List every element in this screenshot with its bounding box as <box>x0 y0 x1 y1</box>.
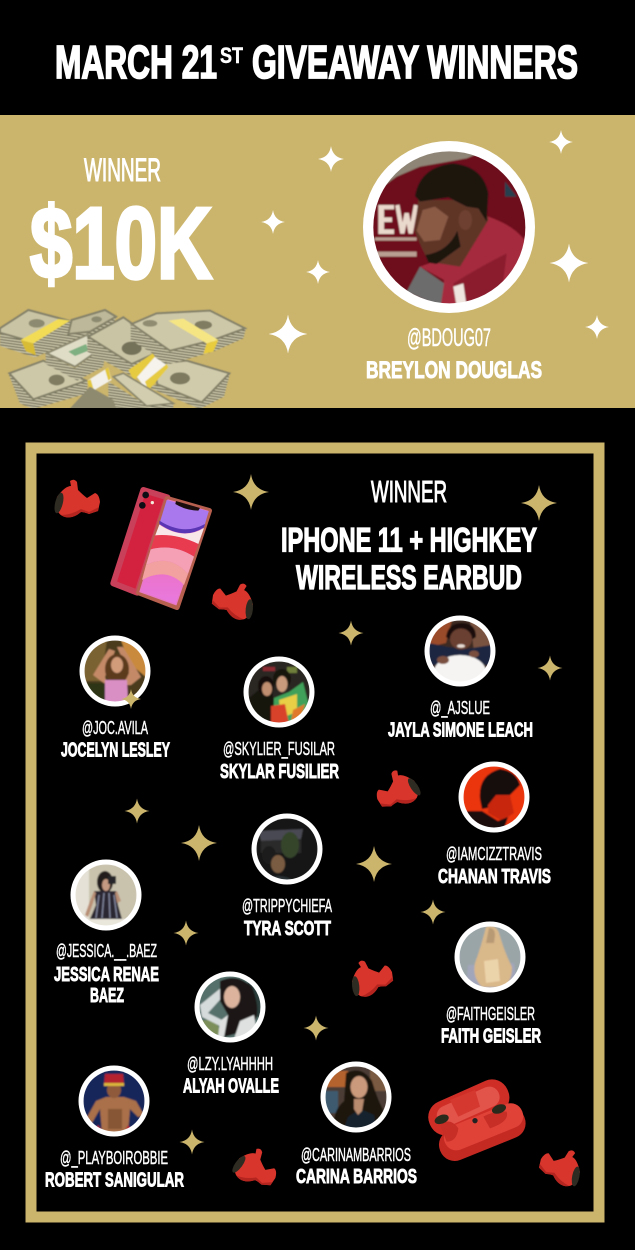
heading: prize description <box>281 522 537 597</box>
panel: phone and earbud winners frame <box>31 448 599 1217</box>
avatar: Jessica <box>70 860 142 930</box>
prize amount: $10K <box>30 188 212 300</box>
avatar: Robert <box>78 1066 150 1136</box>
winner: Chanan Travis <box>438 762 551 888</box>
handle: @CARINAMBARRIOS <box>301 1145 411 1165</box>
winner: Jocelyn Lesley <box>61 636 170 762</box>
winner: Carina Barrios <box>296 1062 417 1188</box>
avatar: Jocelyn <box>80 636 150 709</box>
name: ROBERT SANIGULAR <box>45 1170 184 1192</box>
winner: Tyra Scott <box>242 814 332 940</box>
avatar: Carina <box>320 1062 392 1132</box>
name: JESSICA RENAE <box>54 964 159 986</box>
winner: Jessica Renae Baez <box>54 860 159 1007</box>
icon: red wireless earbud case <box>423 1074 530 1166</box>
avatar: Tyra <box>252 814 322 884</box>
name: FAITH GEISLER <box>441 1026 541 1048</box>
winner: Robert Sanigular <box>45 1066 184 1192</box>
icon: earbud middle right <box>370 764 425 813</box>
handle: @TRIPPYCHIEFA <box>242 896 332 916</box>
winner: Faith Geisler <box>441 922 541 1048</box>
handle: @_PLAYBOIROBBIE <box>60 1148 168 1169</box>
handle: @JESSICA.__.BAEZ <box>56 941 157 962</box>
handle: @BDOUG07: @BDOUG07 <box>407 324 491 352</box>
handle: @JOC.AVILA <box>82 718 148 738</box>
title: ST <box>220 43 243 68</box>
handle: @_AJSLUE <box>430 698 490 719</box>
name: ALYAH OVALLE <box>183 1076 279 1098</box>
panel: grand prize winner <box>0 115 635 410</box>
heading: winner: WINNER <box>371 474 447 509</box>
icon: earbud center <box>343 952 397 1001</box>
winner: Jayla Simone Leach <box>388 616 533 742</box>
name: TYRA SCOTT <box>244 918 331 940</box>
handle: @FAITHGEISLER <box>446 1004 535 1024</box>
icon: earbud by phone <box>208 575 262 624</box>
avatar: Chanan <box>458 762 530 832</box>
name: SKYLAR FUSILIER <box>220 761 339 783</box>
avatar: Skylar <box>244 656 314 728</box>
winner: Skylar Fusilier <box>220 656 339 783</box>
avatar: Jayla <box>424 616 496 689</box>
avatar: Alyah <box>194 972 266 1042</box>
heading: winner: WINNER <box>84 152 161 188</box>
name <box>54 964 159 1007</box>
title: MARCH 21 <box>55 36 217 88</box>
handle: @SKYLIER_FUSILAR <box>223 739 335 760</box>
icon: earbud bottom right <box>535 1140 590 1191</box>
icon: stacks of money <box>0 310 246 410</box>
name: Breylon Douglas: BREYLON DOUGLAS <box>366 357 542 384</box>
avatar: Faith <box>454 922 526 992</box>
winner: Alyah Ovalle <box>183 972 279 1098</box>
name: BAEZ <box>90 985 124 1007</box>
icon: red iPhone 11 <box>113 490 209 607</box>
name: CHANAN TRAVIS <box>438 866 551 888</box>
icon: gold sparkles <box>124 474 562 1154</box>
name: CARINA BARRIOS <box>296 1166 417 1188</box>
name: JAYLA SIMONE LEACH <box>388 720 533 742</box>
title <box>55 36 578 88</box>
handle: @IAMCIZZTRAVIS <box>446 844 542 864</box>
icon: earbud top left <box>53 480 100 517</box>
handle: @LZY.LYAHHHH <box>187 1054 273 1074</box>
icon: white sparkles <box>261 130 609 354</box>
photo: Breylon Douglas <box>363 141 535 313</box>
heading: prize description: WIRELESS EARBUD <box>296 559 522 597</box>
icon: earbud bottom center <box>228 1142 283 1192</box>
name: JOCELYN LESLEY <box>61 740 170 762</box>
